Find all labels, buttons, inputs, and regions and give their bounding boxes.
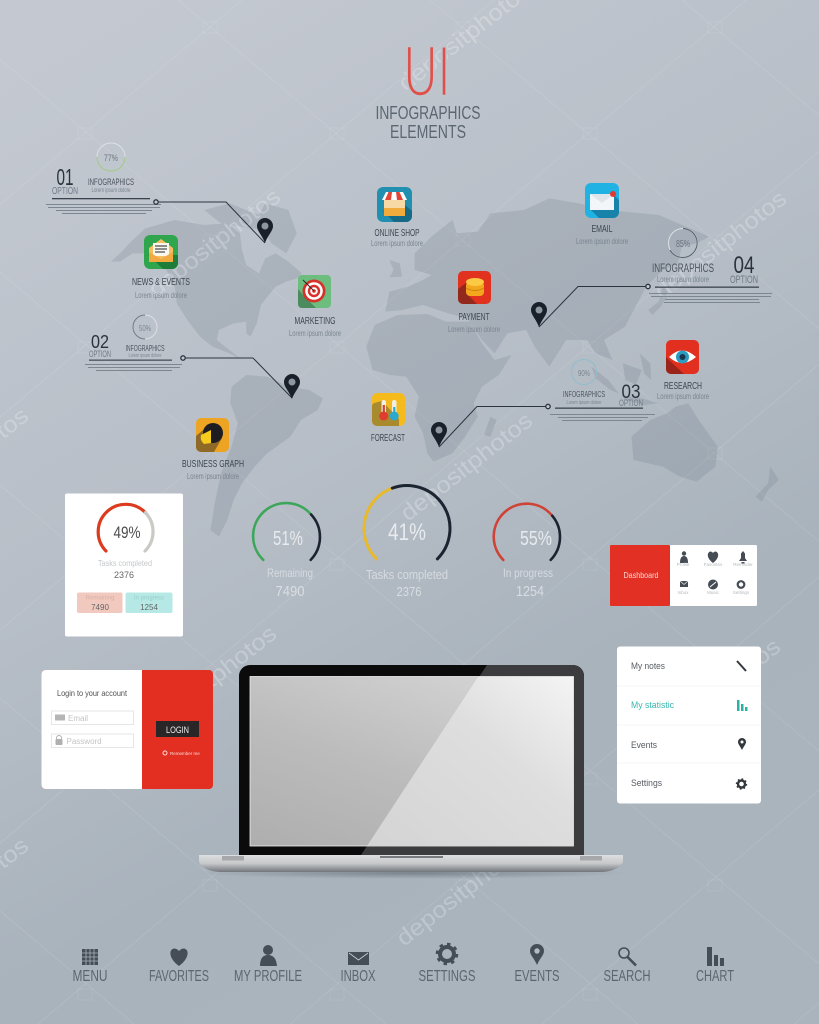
- label: research: [657, 380, 709, 401]
- subtitle: infographics: INFOGRAPHICS: [376, 103, 480, 123]
- nav: menu: MENU: [72, 968, 108, 985]
- option 04: 85%: [676, 239, 690, 250]
- map: north america: [111, 220, 302, 360]
- ring gauge 90%: [572, 360, 596, 384]
- option 01: INFOGRAPHICS: [88, 177, 134, 188]
- connector 3: [439, 406, 548, 447]
- stat: remaining: [77, 592, 122, 613]
- location pin 2: [284, 374, 300, 399]
- icon: news and events: [144, 235, 178, 269]
- option 04: 04: [734, 252, 754, 279]
- panel: side menu: [617, 646, 761, 804]
- panel: tasks card: 2376: [114, 570, 134, 580]
- stat: remaining: Remaining: [86, 596, 114, 602]
- icon: reminder: [739, 551, 747, 564]
- nav: settings: SETTINGS: [418, 968, 476, 985]
- option 02: Lorem ipsum dolore: [128, 353, 162, 359]
- label: payment: Lorem ipsum dolore: [448, 324, 500, 334]
- laptop base: [199, 855, 623, 872]
- watermarks: depositphotos: [391, 832, 533, 951]
- nav: events: EVENTS: [514, 968, 560, 985]
- icon: payment: [458, 271, 491, 304]
- body text lines: [85, 364, 182, 371]
- option 03: [550, 360, 655, 421]
- nav: chart: CHART: [696, 968, 734, 985]
- button: login: LOGIN: [166, 725, 189, 736]
- map: europe and asia: [385, 198, 709, 367]
- panel: login: [42, 670, 213, 789]
- laptop lid: [239, 665, 584, 855]
- stat: in progress: 1254: [140, 603, 158, 612]
- nav: settings: [418, 944, 476, 985]
- panel: tasks card: 49%: [114, 523, 140, 542]
- option 04: [649, 228, 772, 303]
- label: research: RESEARCH: [664, 380, 702, 392]
- option 02: INFOGRAPHICS: [126, 344, 164, 353]
- watermarks: depositphotos: [139, 620, 281, 739]
- icon: profile: [680, 551, 688, 563]
- field: email: Email: [68, 714, 88, 723]
- nav: favorites: FAVORITES: [149, 968, 209, 985]
- ring gauge 77%: [97, 143, 125, 171]
- connector lines with markers: [154, 200, 650, 447]
- option 03: 03: [622, 382, 640, 403]
- label: payment: PAYMENT: [458, 311, 490, 323]
- icon: favorites: [708, 552, 718, 563]
- option 03: Lorem ipsum dolore: [566, 400, 602, 406]
- label: research: Lorem ipsum dolore: [657, 391, 709, 401]
- gauge: in progress: 1254: [516, 583, 544, 600]
- world map: [111, 198, 779, 537]
- option 04: OPTION: [730, 274, 758, 286]
- label: payment: [448, 311, 500, 334]
- watermarks: depositphotos: [395, 407, 537, 526]
- label: news and events: Lorem ipsum dolore: [135, 290, 187, 300]
- remember me: Remember me: [170, 751, 200, 756]
- ring gauge 85%: [668, 228, 698, 258]
- menu item: settings: [631, 778, 746, 789]
- gauge: remaining: 51%: [273, 528, 303, 550]
- title: UI: UI: [404, 32, 450, 112]
- gauge: in progress: 55%: [520, 528, 552, 550]
- stat: in progress: In progress: [134, 596, 164, 602]
- watermarks: depositphotos: [143, 183, 285, 302]
- nav: my profile: [234, 945, 302, 985]
- option 03: INFOGRAPHICS: [563, 389, 605, 399]
- label: email: EMAIL: [592, 223, 613, 235]
- label: online shop: [371, 227, 423, 248]
- body text lines: [46, 204, 161, 214]
- gauge: tasks completed: [364, 486, 450, 599]
- nav: menu: [72, 949, 108, 985]
- nav: inbox: INBOX: [340, 968, 376, 985]
- button: login: [156, 721, 199, 737]
- laptop screen: [250, 676, 574, 846]
- icon captions: Music: [707, 590, 720, 595]
- icon captions: Settings: [733, 590, 750, 595]
- map: madagascar: [484, 417, 497, 437]
- map: british isles: [389, 260, 402, 277]
- gauge: tasks completed: Tasks completed: [366, 567, 448, 582]
- title: [376, 32, 480, 142]
- option 02: [85, 315, 182, 371]
- laptop: [196, 665, 626, 879]
- icon: research: [666, 340, 699, 374]
- menu item: events: [631, 738, 746, 751]
- nav: favorites: [149, 948, 209, 985]
- field: password: Password: [66, 737, 102, 746]
- label: news and events: NEWS & EVENTS: [132, 276, 190, 288]
- icon: business graph: [196, 418, 229, 452]
- body text lines: [550, 414, 655, 421]
- menu item: my notes: My notes: [631, 661, 665, 672]
- map: australia: [631, 403, 718, 482]
- icon: online shop: [377, 187, 412, 222]
- icon: marketing: [298, 275, 331, 308]
- map: arctic islands: [204, 203, 297, 253]
- map: japan and indonesia: [591, 287, 669, 405]
- label: marketing: [289, 315, 341, 338]
- gauge 49%: [98, 504, 153, 551]
- field: email: [52, 711, 134, 724]
- stat: remaining: 7490: [91, 603, 109, 612]
- label: email: Lorem ipsum dolore: [576, 236, 628, 246]
- panel: login: Login to your account: [57, 688, 128, 698]
- field: password: [52, 734, 134, 748]
- icon captions: Favorites: [704, 562, 723, 567]
- icon: music: [708, 580, 718, 590]
- connector 1: [156, 202, 265, 243]
- watermarks: depositphotos: [649, 185, 791, 304]
- subtitle: elements: ELEMENTS: [390, 122, 466, 142]
- gauge: remaining: Remaining: [267, 566, 313, 580]
- laptop shadow: [196, 867, 626, 879]
- nav: events: [514, 944, 560, 985]
- option 03: OPTION: [619, 398, 643, 408]
- icon: forecast: [372, 393, 405, 426]
- option 04: INFOGRAPHICS: [652, 261, 714, 275]
- option 01: 77%: [104, 153, 118, 164]
- stat: in progress: [126, 592, 172, 613]
- gauge: in progress: In progress: [503, 566, 553, 580]
- icon captions: Profile: [677, 562, 690, 567]
- option 01: [46, 143, 161, 214]
- gauge: tasks completed: 2376: [396, 584, 422, 599]
- panel: tasks card: Tasks completed: [98, 558, 152, 568]
- location pin 4: [531, 302, 547, 327]
- menu item: my statistic: My statistic: [631, 700, 674, 711]
- panel: dashboard: Dashboard: [624, 571, 658, 580]
- connector 4: [539, 286, 648, 327]
- nav: search: [604, 948, 650, 985]
- label: marketing: Lorem ipsum dolore: [289, 328, 341, 338]
- gauge: remaining: [253, 503, 320, 600]
- gauge: tasks completed: 41%: [388, 519, 426, 546]
- label: marketing: MARKETING: [294, 315, 336, 327]
- icon: inbox: [680, 581, 688, 587]
- nav: chart: [696, 947, 734, 985]
- bottom navigation: [72, 944, 734, 985]
- location pin 1: [257, 218, 273, 243]
- label: online shop: Lorem ipsum dolore: [371, 238, 423, 248]
- option 01: Lorem ipsum dolore: [92, 188, 131, 194]
- label: business graph: Lorem ipsum dolore: [187, 471, 239, 481]
- label: online shop: ONLINE SHOP: [374, 227, 420, 239]
- menu item: my notes: [631, 661, 746, 672]
- menu item: events: Events: [631, 740, 657, 751]
- option 01: 01: [56, 164, 74, 190]
- gauge: in progress: [494, 504, 560, 600]
- panel: tasks card: [65, 494, 183, 636]
- map: africa: [366, 314, 511, 462]
- icon captions: Inbox: [677, 590, 689, 595]
- label: business graph: BUSINESS GRAPH: [182, 458, 244, 470]
- body text lines: [649, 293, 772, 303]
- menu item: settings: Settings: [631, 778, 662, 789]
- nav: inbox: [340, 952, 376, 985]
- icon: settings: [738, 581, 744, 588]
- label: email: [576, 223, 628, 246]
- connector 2: [183, 358, 292, 398]
- option 01: OPTION: [52, 186, 78, 197]
- option 03: 90%: [578, 368, 590, 378]
- option 02: OPTION: [89, 349, 111, 359]
- nav: my profile: MY PROFILE: [234, 968, 302, 985]
- label: business graph: [182, 458, 244, 481]
- watermarks: depositphotos: [643, 633, 785, 752]
- gauge: remaining: 7490: [276, 583, 304, 600]
- menu item: my statistic: [631, 700, 748, 711]
- option 02: 50%: [139, 323, 151, 333]
- option 04: Lorem ipsum dolore: [657, 275, 709, 284]
- option 02: 02: [91, 332, 109, 352]
- panel: dashboard: [610, 545, 757, 606]
- label: forecast: FORECAST: [371, 432, 405, 444]
- label: news and events: [132, 276, 190, 300]
- ring gauge 50%: [133, 315, 157, 339]
- icon captions: [677, 562, 753, 595]
- map: new zealand: [756, 467, 779, 502]
- icon: email: [585, 183, 619, 218]
- nav: search: SEARCH: [604, 968, 650, 985]
- location pin 3: [431, 422, 447, 447]
- map: south america: [210, 375, 323, 537]
- icon captions: Reminder: [733, 562, 753, 567]
